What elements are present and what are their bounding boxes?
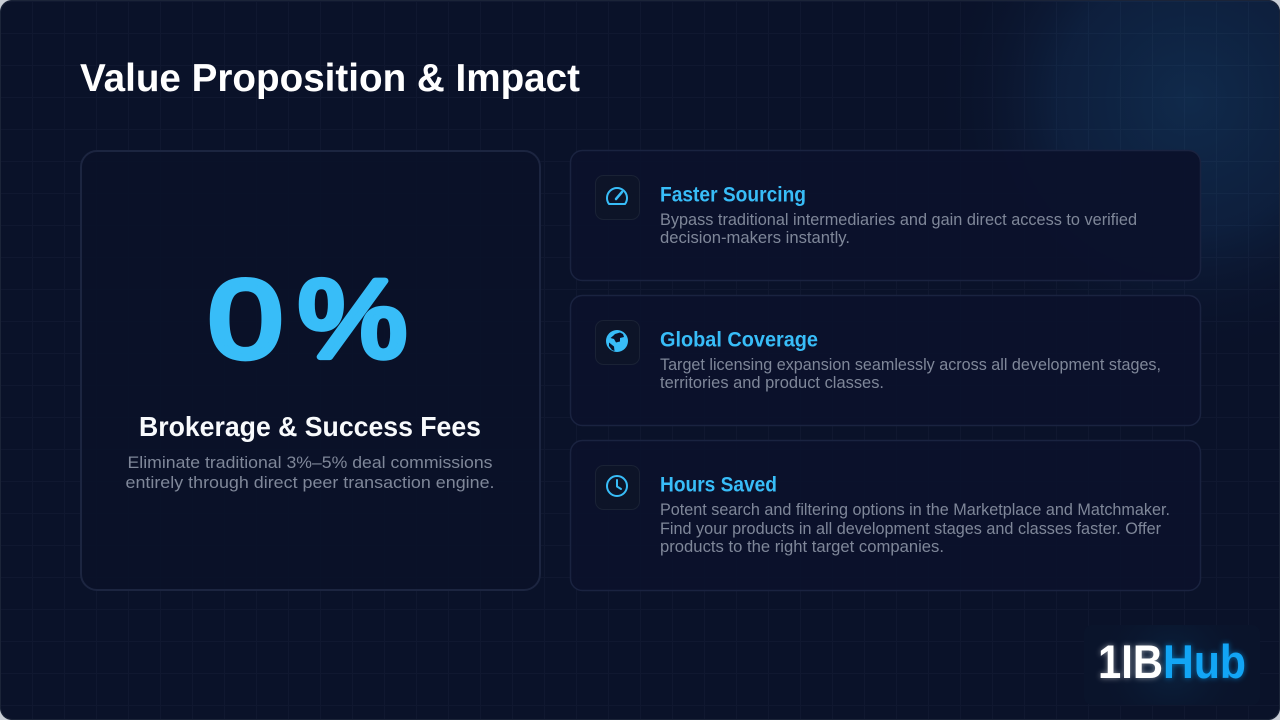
card description: Potent search and filtering options in the Marketplace and Matchmaker. bbox=[660, 500, 1170, 519]
title: Value Proposition & Impact bbox=[80, 57, 580, 100]
icon: speedometer bbox=[596, 176, 640, 220]
card heading: Hours Saved bbox=[660, 474, 777, 496]
panel description: entirely through direct peer transaction engine. bbox=[126, 473, 494, 492]
card description: products to the right target companies. bbox=[660, 537, 944, 556]
logo: 1IBHub: 1IB bbox=[1098, 635, 1163, 688]
card description: Bypass traditional intermediaries and gain direct access to verified bbox=[660, 210, 1137, 229]
card: hours saved bbox=[570, 440, 1200, 590]
card description: Find your products in all development stages and classes faster. Offer bbox=[660, 519, 1161, 538]
card description: territories and product classes. bbox=[660, 373, 884, 392]
card description: decision-makers instantly. bbox=[660, 228, 850, 247]
card description bbox=[660, 210, 1137, 247]
logo: 1IBHub: 1IB bbox=[1098, 635, 1163, 688]
panel description bbox=[126, 453, 494, 492]
logo: 1IBHub bbox=[1084, 625, 1260, 705]
card: global coverage bbox=[570, 296, 1200, 426]
card heading: Faster Sourcing bbox=[660, 184, 806, 206]
icon: clock bbox=[596, 466, 640, 510]
panel: zero percent fees bbox=[81, 151, 540, 590]
panel description: Eliminate traditional 3%–5% deal commissions bbox=[128, 453, 492, 472]
card: faster sourcing bbox=[570, 150, 1200, 280]
icon: globe bbox=[596, 320, 640, 364]
big stat: 0%: 0 bbox=[208, 258, 282, 381]
card heading: Global Coverage bbox=[660, 328, 818, 352]
big stat: 0%: % bbox=[298, 258, 407, 381]
logo: 1IBHub: Hub bbox=[1163, 635, 1246, 688]
logo: 1IBHub: Hub bbox=[1163, 635, 1246, 688]
card description: Target licensing expansion seamlessly across all development stages, bbox=[660, 355, 1161, 374]
big stat: 0% bbox=[208, 258, 407, 381]
panel heading: Brokerage & Success Fees bbox=[139, 411, 481, 442]
card description bbox=[660, 355, 1161, 392]
card description bbox=[660, 500, 1170, 556]
